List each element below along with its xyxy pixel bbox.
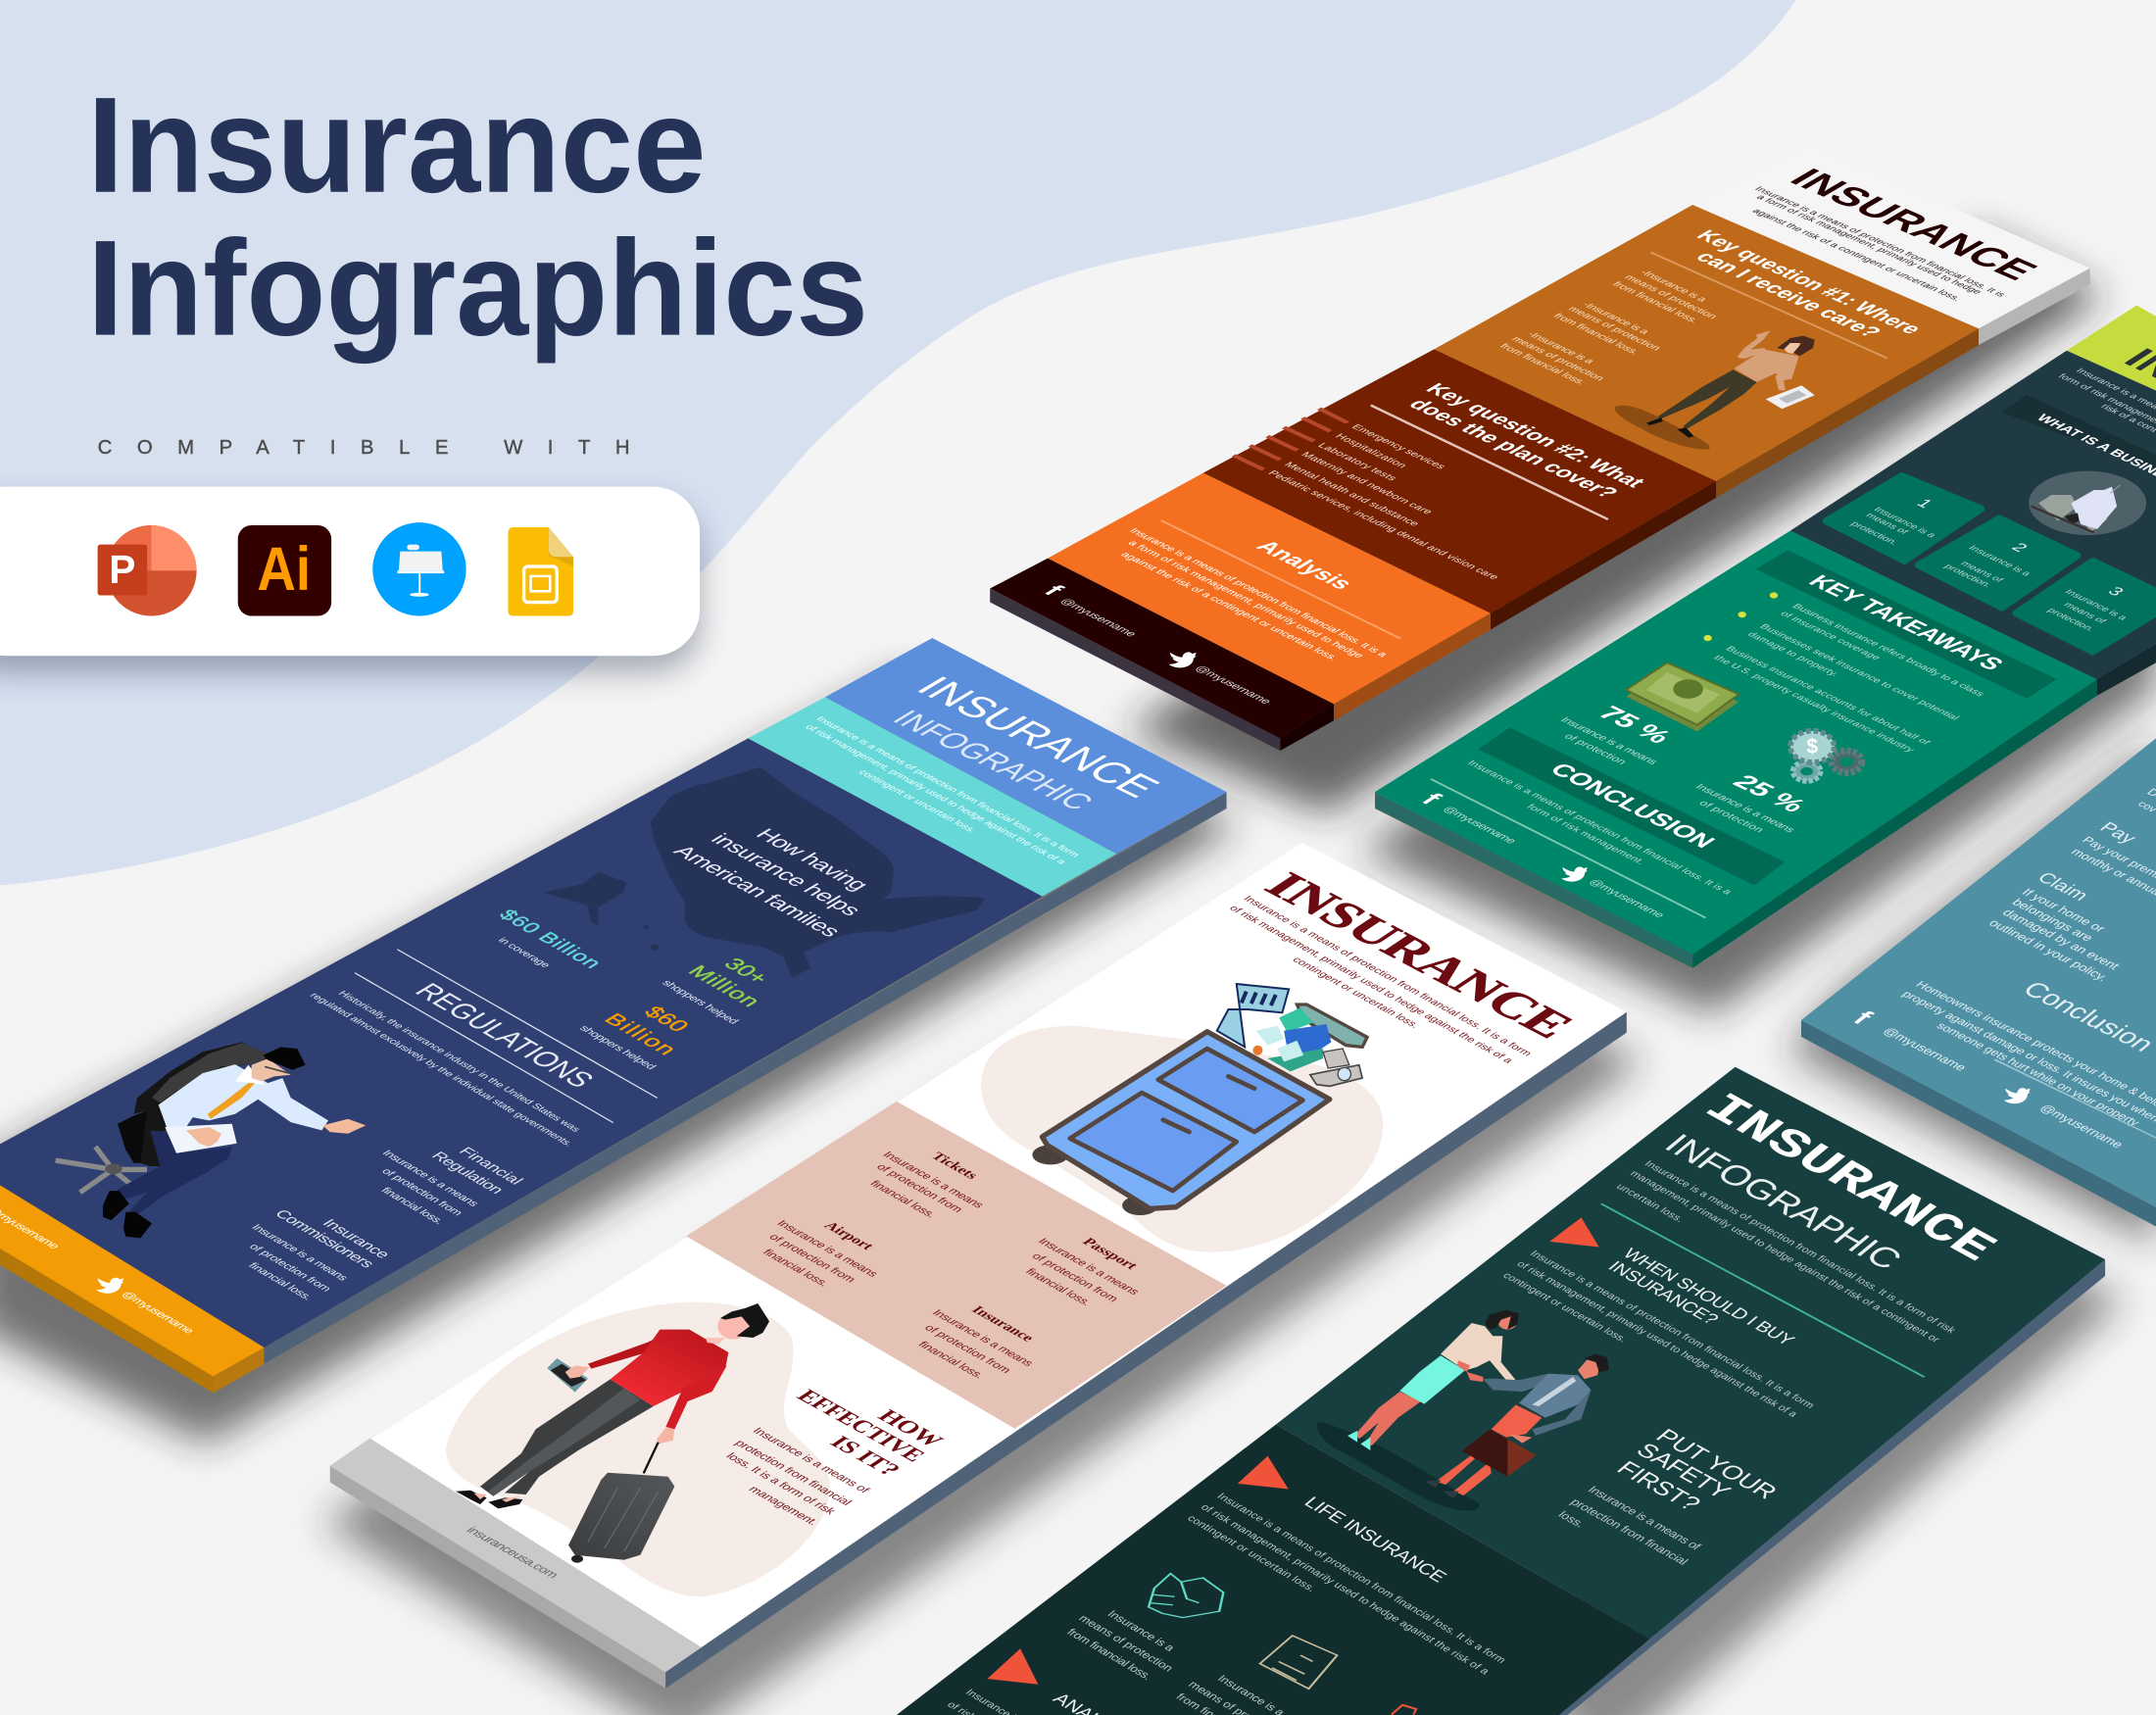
card: step 2	[1918, 518, 2078, 608]
subtitle: compatible with: COMPATIBLE WITH	[98, 437, 630, 459]
banner: what is a business	[2002, 395, 2156, 493]
heading: put your safety first	[1611, 1425, 1782, 1515]
text: care bullet points: means of protection	[1565, 305, 1663, 352]
illustration: handshake between two people	[1317, 1310, 1609, 1511]
text: coverage list: Laboratory tests	[1315, 442, 1399, 482]
text: conclusion paragraph: form of risk management.	[1524, 803, 1646, 866]
icon: gears: $	[1806, 735, 1818, 758]
heading: INSURANCE: INSURANCE	[1781, 163, 2047, 285]
footer: social handles	[1415, 789, 1668, 920]
text: care bullet points: from financial loss.	[1496, 342, 1589, 386]
illustration: traveller with suitcase	[456, 1303, 769, 1563]
text: life insurance paragraph: of risk management, primarily used to hedge against the risk of a	[1198, 1502, 1493, 1677]
text: care bullet points: -Insurance is a	[1638, 269, 1710, 304]
text: effectiveness paragraph	[723, 1426, 873, 1527]
text: tickets: financial loss.	[867, 1178, 940, 1220]
banner: conclusion: CONCLUSION	[1544, 760, 1721, 852]
card: step 2: 2	[2008, 540, 2033, 555]
icon: orange outline	[1392, 1705, 1416, 1715]
text: care bullet points: from financial loss.	[1550, 312, 1642, 357]
stat: 25 percent: of protection	[1696, 800, 1766, 834]
title: Insurance	[87, 70, 706, 221]
card: step 3: 3	[2104, 584, 2129, 599]
stat: $60 billion coverage: $60 Billion	[494, 906, 606, 971]
stat: $60 billion shoppers	[576, 1003, 695, 1071]
heading: key question 2: does the plan cover?	[1403, 395, 1624, 501]
stat: $60 billion shoppers: $60	[639, 1003, 695, 1035]
panel: orange insurance infographic	[990, 144, 2090, 751]
heading: key question 1: Key question #1: Where	[1691, 226, 1928, 337]
text: insurance commissioners	[246, 1207, 394, 1302]
footer: social handles: f	[1038, 582, 1069, 600]
text: coverage list: Mental health and substance	[1282, 461, 1422, 528]
icon: red triangle	[1549, 1217, 1599, 1248]
text: takeaways list: Business insurance refers broadly to a class	[1789, 603, 1986, 698]
text: care bullet points: means of protection	[1622, 273, 1720, 320]
text: tickets: Insurance is a means	[880, 1150, 987, 1210]
text: insurance commissioners: Insurance is a means	[249, 1223, 351, 1283]
stat: $60 billion shoppers: Billion	[599, 1009, 682, 1058]
text: insurance: financial loss.	[915, 1339, 988, 1381]
text: coverage list: Hospitalization	[1333, 432, 1409, 469]
heading: how having insurance helps: insurance helps	[706, 830, 867, 919]
text: analysis paragraph: Insurance is a means of protection from financial loss. It is a	[1126, 526, 1391, 659]
stat: 75 percent: 75 %	[1592, 702, 1678, 747]
footer: social handles: @myusername	[1192, 663, 1275, 706]
icon: red triangle	[987, 1648, 1038, 1685]
heading: INSURANCE: INSURANCE	[1252, 865, 1585, 1046]
text: passport: of protection from	[1029, 1251, 1122, 1303]
text: handshake caption: from financial loss.	[1064, 1626, 1155, 1682]
card: step 1: protection.	[1848, 520, 1900, 547]
heading: INSURANCE INFOGRAPHIC: INFOGRAPHIC	[885, 706, 1101, 815]
illustration: blob backdrop	[981, 1026, 1383, 1252]
text: airport: of protection from	[766, 1232, 859, 1285]
heading: how effective is it: IS IT?	[824, 1433, 906, 1480]
text: insurance commissioners: Insurance	[318, 1217, 394, 1261]
text: effectiveness paragraph: protection from financial	[732, 1438, 855, 1507]
footer: social handles: f	[1415, 789, 1447, 808]
illustration: luggage trolley	[1032, 984, 1367, 1215]
list marks: coverage bars	[1234, 409, 1348, 469]
heading: INSURANCE INFOGRAPHIC: INFOGRAPHIC	[1657, 1128, 1910, 1276]
text: takeaways list	[1711, 603, 1986, 755]
panel: dark green insurance infographic	[897, 1067, 2105, 1715]
heading: INSURANCE INFOGRAPHIC	[1657, 1086, 2007, 1276]
title: Infographics	[87, 213, 868, 365]
text: safety paragraph: Insurance is a means of	[1586, 1484, 1704, 1552]
text: coverage list: Maternity and newborn care	[1298, 451, 1435, 516]
text: care bullet points: -Insurance is a	[1525, 330, 1597, 366]
text: care bullet points: means of protection	[1509, 335, 1607, 382]
heading: analysis: Analysis	[1250, 537, 1358, 593]
icon: handshake outline	[1149, 1574, 1223, 1618]
text: airport: Airport	[820, 1220, 876, 1252]
heading: how effective is it: EFFECTIVE	[791, 1386, 930, 1466]
text: airport: Insurance is a means	[774, 1218, 881, 1279]
icon: document outline	[1260, 1636, 1337, 1689]
icon: gears	[1790, 731, 1862, 781]
text: insurance commissioners: of protection from	[246, 1242, 334, 1294]
card: step 1: Insurance is a	[1871, 506, 1938, 539]
illustration: businessman on office chair	[56, 1042, 366, 1238]
text: coverage list: Emergency services	[1348, 423, 1448, 470]
heading: regulations: REGULATIONS	[408, 979, 602, 1092]
stat: 30+ million shoppers	[660, 955, 774, 1026]
footer: social handles	[1038, 582, 1275, 706]
text: pay and claim steps: damaged by an event	[1999, 906, 2123, 972]
heading: how having insurance helps: American families	[668, 842, 847, 940]
heading: how effective is it: HOW	[872, 1406, 949, 1451]
heading: life insurance: LIFE INSURANCE	[1299, 1494, 1450, 1586]
footer: social handles: @myusername	[1440, 805, 1519, 846]
text: handshake caption: Insurance is a	[1104, 1608, 1178, 1653]
icon: PowerPoint	[98, 525, 197, 616]
text: airport: financial loss.	[760, 1247, 832, 1289]
panel: green business insurance infographic	[1375, 305, 2156, 968]
text: tickets: Tickets	[927, 1151, 981, 1182]
map: United States	[543, 767, 985, 978]
text: effectiveness paragraph: management.	[746, 1484, 822, 1527]
text: coverage list: Pediatric services, including dental and vision care	[1265, 469, 1501, 581]
text: intro paragraph: a form of risk management, primarily used to hedge	[1753, 194, 1984, 296]
text: financial regulation: Regulation	[427, 1150, 508, 1197]
footer: social handles: @myusername	[1586, 877, 1668, 920]
card: step 2: means of	[1958, 560, 2005, 584]
text: intro paragraph: against the risk of a contingent or uncertain loss.	[1749, 208, 1963, 303]
card: step 1: means of	[1863, 512, 1910, 536]
text: takeaways list: the U.S. property casualty insurance industry	[1711, 655, 1917, 755]
icon: PowerPoint: P	[109, 547, 135, 592]
text: takeaways list: Businesses seek insurance to cover potential	[1757, 623, 1961, 722]
text: pay and claim steps: outlined in your policy.	[1985, 917, 2112, 983]
stat: $60 billion coverage: in coverage	[495, 936, 553, 969]
text: financial regulation: of protection from	[379, 1167, 466, 1217]
text: financial regulation: Financial	[455, 1145, 526, 1187]
footer: social handles	[0, 1204, 198, 1336]
icon: office building	[2029, 471, 2146, 535]
text: takeaways list: damage to property.	[1744, 631, 1841, 678]
title	[87, 70, 868, 365]
text: intro paragraph: of risk management, primarily used to hedge against the risk of a	[803, 723, 1068, 866]
illustration: blob backdrop	[446, 1302, 830, 1596]
text: intro paragraph: management, primarily used to hedge against the risk of a contingent or	[1628, 1169, 1942, 1345]
text: financial regulation: Insurance is a means	[379, 1149, 481, 1208]
text: intro paragraph: uncertain loss.	[1614, 1182, 1687, 1224]
text: analysis paragraph: against the risk of a contingent or uncertain loss.	[1118, 551, 1341, 662]
card: step 3	[2016, 561, 2156, 652]
stat: 25 percent: Insurance is a means	[1692, 783, 1797, 834]
stat: 30+ million shoppers: 30+	[718, 955, 774, 987]
icon: Illustrator	[238, 525, 331, 616]
footer: social handles: @myusername	[1057, 596, 1141, 639]
text: life insurance paragraph: contingent or uncertain loss.	[1185, 1513, 1318, 1593]
heading: put your safety first: FIRST?	[1611, 1457, 1705, 1515]
text: regulations paragraph: Historically, the insurance industry in the United States was	[335, 989, 583, 1134]
text: intro paragraph: Insurance is a means of protection from financial loss. It is a form	[1241, 895, 1534, 1058]
heading: how having insurance helps: How having	[751, 825, 874, 894]
icon: Keynote	[372, 522, 466, 616]
text: insurance commissioners: financial loss.	[246, 1261, 316, 1302]
panel: navy insurance infographic	[0, 638, 1227, 1393]
text: passport: financial loss.	[1022, 1266, 1095, 1307]
footer: social handles	[1847, 1006, 2127, 1151]
text: financial regulation: financial loss.	[378, 1186, 447, 1226]
heading: when should I buy insurance: INSURANCE?	[1604, 1257, 1723, 1327]
heading: INSURANCE INFOGRAPHIC: INSURANCE	[906, 670, 1170, 804]
icon: Illustrator: Ai	[257, 535, 311, 604]
panel: teal homeowners insurance infographic	[1801, 738, 2156, 1227]
text: buying paragraph: Insurance is a means of protection from financial loss. It is a form	[1527, 1249, 1817, 1410]
card: step 3: protection.	[2044, 607, 2097, 633]
text: passport: Insurance is a means	[1035, 1236, 1143, 1297]
stat: 30+ million shoppers: shoppers helped	[660, 979, 741, 1026]
text: analysis paragraph: a form of risk management, primarily used to hedge	[1125, 539, 1366, 660]
heading: INSURANCE INFOGRAPHIC: INSURANCE	[1691, 1086, 2007, 1271]
text: takeaways list: of insurance coverage	[1778, 611, 1883, 662]
text: insurance: Insurance	[968, 1304, 1037, 1345]
text: insurance: Insurance is a means	[929, 1307, 1037, 1368]
text: pay and claim steps: belongings are	[2009, 896, 2097, 944]
illustration: woman with document	[1615, 330, 1815, 449]
text: intro paragraph: Insurance is a means of protection from financial loss. It is	[1752, 185, 2007, 299]
text: takeaways list: Business insurance accounts for about half of	[1723, 645, 1933, 747]
text: buying paragraph: of risk management, primarily used to hedge against the risk of a	[1514, 1259, 1800, 1419]
text: safety paragraph: protection from financial	[1568, 1496, 1691, 1567]
text: insurance	[915, 1304, 1037, 1381]
text: life insurance paragraph: Insurance is a means of protection from financial loss. It is a form	[1214, 1492, 1508, 1665]
banner: key takeaways	[1756, 550, 2057, 699]
heading: key question 1: can I receive care?	[1690, 248, 1887, 340]
stat: $60 billion shoppers: shoppers helped	[576, 1024, 659, 1071]
text: buying paragraph: contingent or uncertain loss.	[1500, 1271, 1630, 1345]
text: insurance commissioners: Commissioners	[270, 1207, 378, 1270]
text: passport: Passport	[1079, 1236, 1141, 1272]
text: conclusion: property against damage or loss. It insures you when	[1899, 989, 2156, 1124]
text: safety paragraph: loss.	[1555, 1509, 1588, 1530]
text: pay and claim steps: Claim	[2033, 869, 2092, 905]
card: step 1	[1826, 475, 1982, 561]
heading: when should I buy insurance: WHEN SHOULD I BUY	[1619, 1245, 1799, 1348]
text: pay and claim steps: If your home or	[2019, 886, 2109, 935]
text: intro paragraph: of risk management, primarily used to hedge against the risk of a	[1227, 904, 1516, 1065]
banner: conclusion	[1478, 727, 1785, 886]
heading: put your safety first: PUT YOUR	[1650, 1425, 1782, 1503]
card: step 1: 1	[1913, 496, 1937, 511]
text: care bullet points: -Insurance is a	[1580, 301, 1652, 336]
text: effectiveness paragraph: loss. It is a form of risk	[723, 1451, 840, 1517]
panel: white travel insurance infographic	[330, 843, 1627, 1689]
heading: put your safety first: SAFETY	[1631, 1440, 1736, 1503]
card: step 2: Insurance is a	[1966, 544, 2034, 578]
footer: social handles: @myusername	[1880, 1025, 1970, 1073]
text: care bullet points	[1496, 269, 1720, 386]
text: insurance: of protection from	[921, 1322, 1014, 1375]
text: handshake caption: means of protection	[1076, 1612, 1176, 1674]
text: tickets: of protection from	[873, 1161, 966, 1214]
icon: red triangle	[1238, 1456, 1289, 1489]
bullets: yellow dots	[1703, 592, 1778, 641]
icon: Google Slides	[508, 527, 573, 616]
stat: 25 percent: 25 %	[1727, 770, 1813, 816]
footer: social handles: f	[1847, 1006, 1880, 1029]
text: effectiveness paragraph: Insurance is a means of	[750, 1426, 873, 1495]
text: pay and claim steps	[1985, 786, 2156, 983]
card: step 2: protection.	[1941, 563, 1994, 589]
stat: 75 percent: of protection	[1561, 732, 1629, 766]
stat: 75 percent: Insurance is a means	[1557, 716, 1660, 766]
text: financial regulation	[378, 1145, 526, 1226]
card: step 3: Insurance is a	[2062, 588, 2130, 622]
text: intro paragraph: contingent or uncertain loss.	[856, 768, 978, 835]
footer: social handles: @myusername	[2036, 1102, 2127, 1151]
text: conclusion paragraph: Insurance is a means of protection from financial loss. It is a	[1465, 760, 1734, 896]
footer: social handles: @myusername	[119, 1290, 198, 1336]
stat: 30+ million shoppers: Million	[683, 961, 766, 1010]
icon: money stack	[1626, 662, 1739, 731]
heading: key question 2: Key question #2: What	[1421, 380, 1651, 491]
text: conclusion: someone gets hurt while on your property	[1934, 1020, 2143, 1128]
stat: 75 percent	[1557, 702, 1678, 766]
text: regulations paragraph: regulated almost exclusively by the individual state governments.	[307, 992, 575, 1149]
text: intro paragraph: Insurance is a means of protection from financial loss. It is a form of risk	[1642, 1159, 1958, 1336]
text: pay and claim steps: Pay	[2095, 819, 2140, 847]
text: intro paragraph: Insurance is a means of protection from financial loss. It is a form	[813, 715, 1081, 859]
card: step 3: means of	[2061, 602, 2108, 625]
banner: key takeaways: KEY TAKEAWAYS	[1802, 571, 2009, 674]
text: care bullet points: from financial loss.	[1609, 280, 1701, 324]
text: intro paragraph: contingent or uncertain loss.	[1290, 956, 1422, 1030]
card: compatible software	[0, 487, 700, 672]
footer: website: insuranceusa.com	[464, 1525, 563, 1581]
